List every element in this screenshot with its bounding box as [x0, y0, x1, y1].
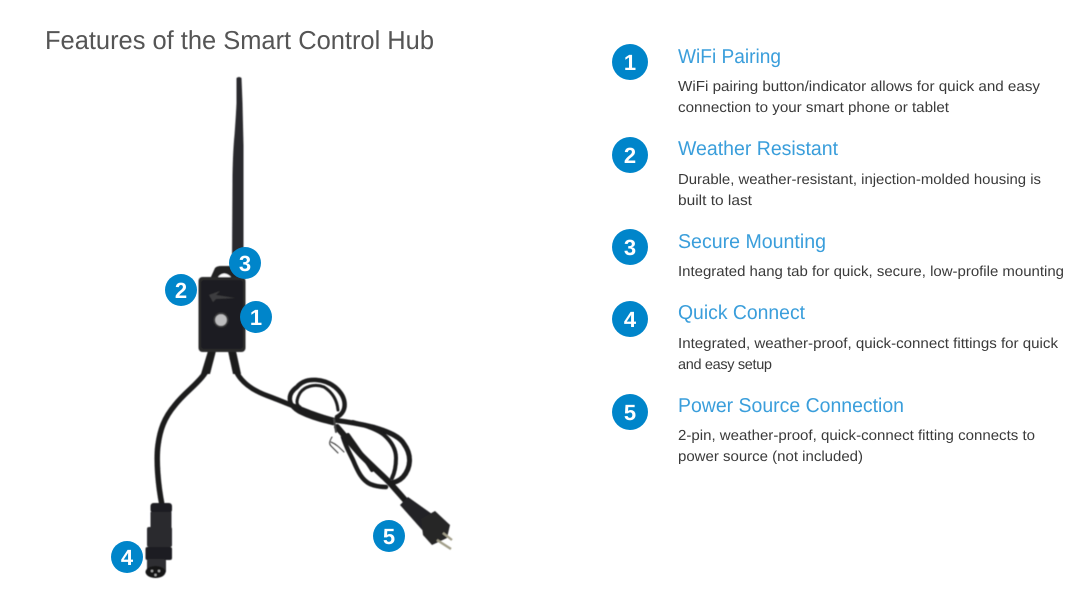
cable strain reliefs	[201, 351, 216, 374]
feature 5: Power Source Connection: Power Source Connection	[678, 395, 904, 417]
feature 4: Quick Connect	[612, 301, 1059, 373]
feature 2: Weather Resistant: Weather Resistant	[678, 138, 838, 160]
feature 4: Quick Connect: and easy setup	[678, 357, 772, 373]
feature 4: Quick Connect: Integrated, weather-proof, quick-connect fittings for quick	[678, 336, 1059, 352]
badge 1 on photo	[240, 301, 272, 333]
badge 3 on photo: 3	[239, 251, 251, 276]
feature 3: Secure Mounting: Integrated hang tab for quick, secure, low-profile mounting	[678, 264, 1064, 280]
badge 2 on photo	[165, 274, 197, 306]
badge 4 on photo: 4	[121, 545, 134, 570]
badge 5 on photo: 5	[383, 524, 395, 549]
feature 1: WiFi Pairing: connection to your smart phone or tablet	[678, 100, 949, 116]
feature 5: Power Source Connection	[612, 394, 1035, 465]
right coiled cable	[232, 358, 410, 500]
pairing button	[214, 312, 228, 328]
feature 5: Power Source Connection: 5	[624, 400, 636, 425]
badge 4 on photo	[111, 541, 143, 573]
feature 3: Secure Mounting	[612, 229, 1064, 280]
badge 5 on photo	[373, 520, 405, 552]
feature 4: Quick Connect: Quick Connect	[678, 302, 805, 324]
feature 1: WiFi Pairing: WiFi Pairing	[678, 46, 781, 68]
badge 3 on photo	[229, 247, 261, 279]
feature 2: Weather Resistant	[612, 137, 1041, 209]
hang tab	[210, 266, 240, 279]
housing body	[198, 277, 246, 352]
feature 5: Power Source Connection: 2-pin, weather-proof, quick-connect fitting connects to	[678, 428, 1035, 444]
feature 4: Quick Connect: 4	[624, 307, 637, 332]
feature 3: Secure Mounting: Secure Mounting	[678, 231, 826, 253]
feature 2: Weather Resistant: 2	[624, 143, 636, 168]
feature 2: Weather Resistant: Durable, weather-resistant, injection-molded housing is	[678, 172, 1041, 188]
antenna	[232, 77, 244, 262]
logo mark	[209, 291, 235, 302]
product photo: smart control hub	[146, 77, 452, 578]
title: Features of the Smart Control Hub	[45, 25, 434, 55]
feature 1: WiFi Pairing: 1	[624, 50, 636, 75]
feature 1: WiFi Pairing: WiFi pairing button/indicator allows for quick and easy	[678, 79, 1041, 95]
hub housing	[198, 266, 246, 374]
badge 2 on photo: 2	[175, 278, 187, 303]
feature 1: WiFi Pairing	[612, 44, 1041, 116]
feature 3: Secure Mounting: 3	[624, 235, 636, 260]
feature 5: Power Source Connection: power source (not included)	[678, 449, 863, 465]
plug 5	[400, 497, 452, 549]
badge 1 on photo: 1	[250, 305, 262, 330]
left cable	[157, 358, 209, 505]
feature 2: Weather Resistant: built to last	[678, 193, 752, 209]
connector 4	[146, 503, 172, 578]
